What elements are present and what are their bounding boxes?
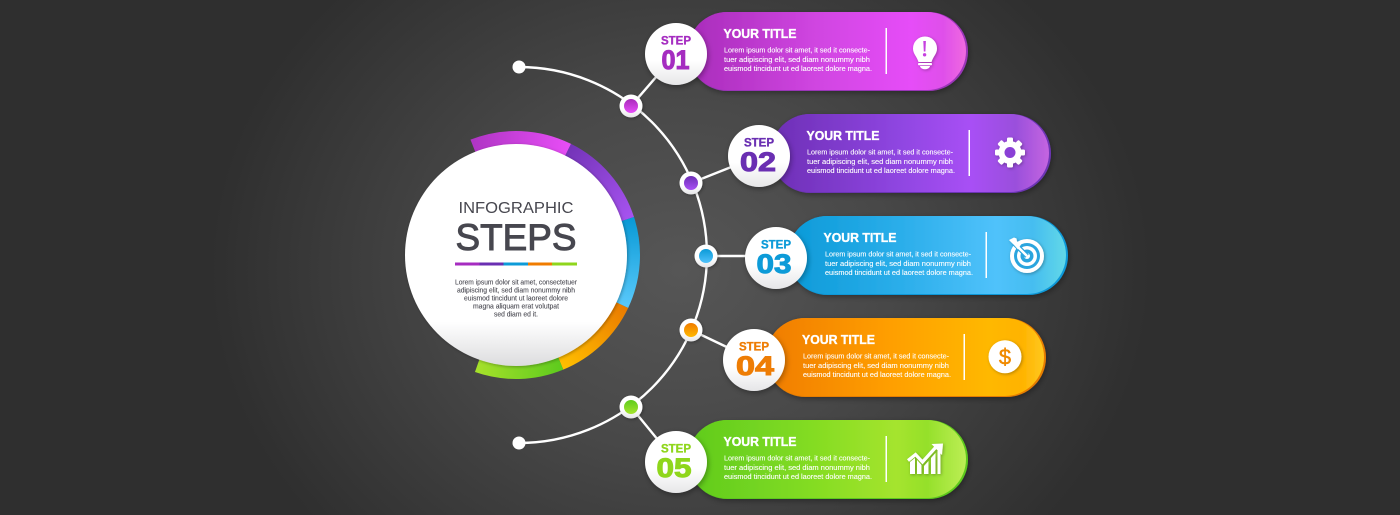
description: euismod tincidunt ut laoreet dolore bbox=[464, 294, 568, 303]
body: Lorem ipsum dolor sit amet, it sed it consecte- bbox=[724, 46, 871, 54]
divider bbox=[886, 28, 887, 74]
divider bbox=[964, 334, 965, 380]
node 4 bbox=[680, 318, 702, 342]
step badge: STEP bbox=[744, 138, 774, 150]
body: Lorem ipsum dolor sit amet, it sed it consecte- bbox=[803, 352, 950, 360]
ring segments bbox=[473, 139, 632, 371]
panel: step 01 bbox=[645, 12, 968, 91]
panel: step 04 bbox=[723, 318, 1046, 397]
description: adipiscing elit, sed diam nonummy nibh bbox=[457, 285, 575, 294]
pill bbox=[688, 420, 968, 499]
step badge: 03 bbox=[756, 249, 792, 279]
divider bbox=[968, 130, 970, 176]
body: euismod tincidunt ut ed laoreet dolore magna. bbox=[825, 268, 973, 277]
description: Lorem ipsum dolor sit amet, consectetuer bbox=[455, 277, 578, 286]
icon: dollar coin: $ bbox=[999, 344, 1011, 370]
step badge: STEP bbox=[661, 444, 691, 456]
title: YOUR TITLE bbox=[806, 129, 880, 143]
step badge: 05 bbox=[656, 453, 692, 483]
step badge: 02 bbox=[740, 147, 776, 177]
icon: growth chart bbox=[908, 444, 943, 474]
description bbox=[455, 277, 578, 319]
body: tuer adipiscing elit, sed diam nonummy nibh bbox=[724, 463, 870, 472]
title: YOUR TITLE bbox=[824, 231, 896, 245]
pill bbox=[766, 318, 1046, 397]
body bbox=[803, 352, 951, 379]
body bbox=[807, 148, 955, 175]
divider bbox=[986, 232, 987, 278]
body: Lorem ipsum dolor sit amet, it sed it consecte- bbox=[807, 148, 954, 156]
body: Lorem ipsum dolor sit amet, it sed it consecte- bbox=[825, 250, 972, 258]
icon: light bulb bbox=[913, 36, 937, 69]
body bbox=[724, 46, 872, 73]
heading: steps: STEPS bbox=[456, 216, 576, 258]
panel: step 05 bbox=[645, 420, 968, 499]
icon: dollar coin bbox=[988, 340, 1022, 373]
title: YOUR TITLE bbox=[802, 333, 875, 347]
body: tuer adipiscing elit, sed diam nonummy nibh bbox=[825, 259, 971, 268]
description: sed diam ed it. bbox=[494, 310, 538, 319]
arc start dot bbox=[512, 60, 526, 74]
step badge: STEP bbox=[761, 240, 791, 252]
arc end dot bbox=[512, 436, 526, 450]
title: YOUR TITLE bbox=[724, 27, 796, 41]
title: YOUR TITLE bbox=[724, 435, 796, 449]
body: euismod tincidunt ut ed laoreet dolore magna. bbox=[803, 370, 951, 379]
step badge bbox=[645, 23, 707, 85]
step badge bbox=[728, 125, 790, 187]
step badge: STEP bbox=[739, 342, 769, 354]
timeline arc bbox=[519, 54, 776, 462]
body bbox=[724, 454, 872, 481]
body: euismod tincidunt ut ed laoreet dolore magna. bbox=[724, 64, 872, 73]
body: Lorem ipsum dolor sit amet, it sed it consecte- bbox=[724, 454, 871, 462]
body: tuer adipiscing elit, sed diam nonummy nibh bbox=[807, 157, 953, 166]
step badge bbox=[645, 431, 707, 493]
body: euismod tincidunt ut ed laoreet dolore magna. bbox=[807, 166, 955, 175]
node 1 bbox=[620, 94, 642, 118]
central circle with coloured ring bbox=[405, 139, 632, 371]
step badge: 01 bbox=[662, 45, 690, 75]
panel: step 03 bbox=[745, 216, 1068, 295]
colour bar bbox=[455, 262, 577, 266]
body: tuer adipiscing elit, sed diam nonummy nibh bbox=[724, 55, 870, 64]
body: tuer adipiscing elit, sed diam nonummy nibh bbox=[803, 361, 949, 370]
panel: step 02 bbox=[728, 114, 1051, 193]
pill bbox=[688, 12, 968, 91]
white disc bbox=[405, 144, 627, 366]
heading: infographic: INFOGRAPHIC bbox=[458, 200, 574, 217]
divider bbox=[886, 436, 887, 482]
step badge: STEP bbox=[661, 36, 691, 48]
node 2 bbox=[680, 172, 702, 194]
pill bbox=[771, 114, 1051, 193]
icon: target bbox=[1009, 238, 1044, 273]
step badge bbox=[723, 329, 785, 391]
step badge bbox=[745, 227, 807, 289]
pill bbox=[788, 216, 1068, 295]
description: magna aliquam erat volutpat bbox=[473, 302, 559, 311]
icon: gear bbox=[995, 138, 1025, 168]
step badge: 04 bbox=[736, 351, 774, 381]
body: euismod tincidunt ut ed laoreet dolore magna. bbox=[724, 472, 872, 481]
body bbox=[825, 250, 973, 277]
node 3 bbox=[694, 244, 718, 268]
node 5 bbox=[620, 396, 642, 418]
